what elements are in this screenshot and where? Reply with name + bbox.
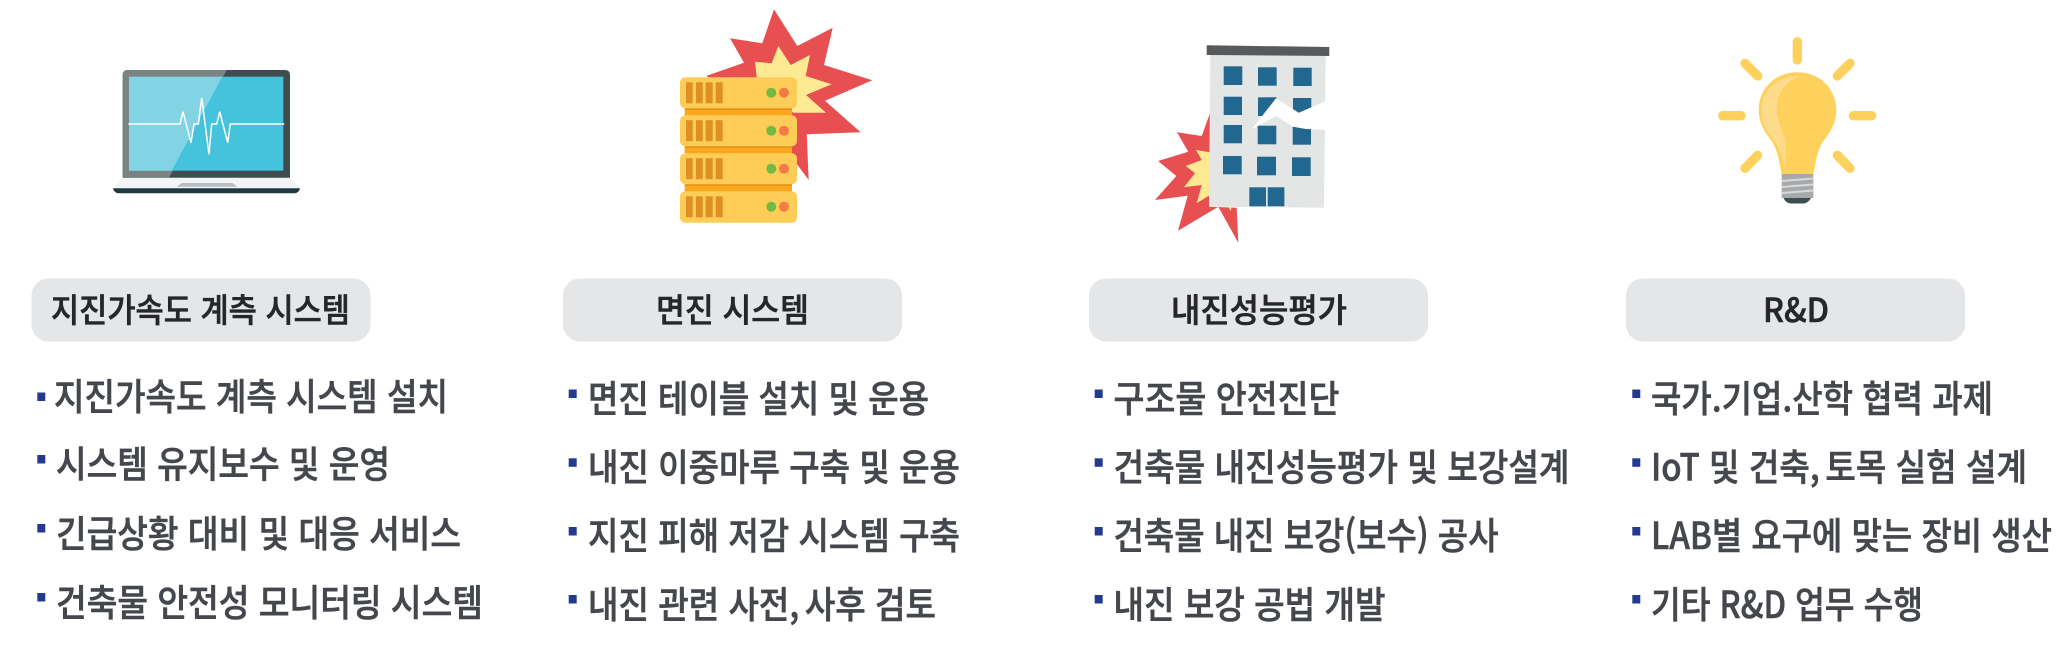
list: R&D 항목: 기타 R&D 업무 수행 bbox=[1651, 575, 1923, 629]
icon: light bulb bbox=[1723, 42, 1872, 204]
list: 면진 시스템 항목: 지진 피해 저감 시스템 구축 bbox=[588, 506, 960, 560]
icon: laptop with seismograph bbox=[113, 70, 300, 193]
list: 내진성능평가 항목 bbox=[1095, 369, 1570, 629]
heading pill bbox=[1626, 278, 1965, 342]
list: 면진 시스템 항목: 면진 테이블 설치 및 운용 bbox=[588, 369, 929, 423]
list: 내진성능평가 항목: 구조물 안전진단 bbox=[1114, 369, 1340, 423]
list: 지진가속도 계측 항목: 지진가속도 계측 시스템 설치 bbox=[54, 367, 448, 421]
list: 내진성능평가 항목: 내진 보강 공법 개발 bbox=[1114, 575, 1386, 629]
heading pill: 지진가속도 계측 시스템 bbox=[51, 284, 350, 332]
list: 지진가속도 계측 항목: 건축물 안전성 모니터링 시스템 bbox=[56, 573, 483, 627]
heading pill bbox=[1089, 278, 1428, 342]
list: 지진가속도 계측 항목: 시스템 유지보수 및 운영 bbox=[56, 434, 390, 488]
icon: damaged building with explosion bbox=[1155, 45, 1329, 243]
heading pill bbox=[563, 278, 902, 342]
list: R&D 항목: 국가.기업.산학 협력 과제 bbox=[1651, 369, 1993, 423]
list: 면진 시스템 항목: 내진 관련 사전, 사후 검토 bbox=[588, 575, 936, 629]
panel: R&D bbox=[1626, 42, 2052, 629]
heading pill: 내진성능평가 bbox=[1171, 284, 1347, 332]
icon: server rack with explosion bbox=[680, 9, 872, 223]
list: 내진성능평가 항목: 건축물 내진 보강(보수) 공사 bbox=[1114, 506, 1498, 560]
list: R&D 항목: IoT 및 건축, 토목 실험 설계 bbox=[1651, 438, 2027, 492]
list: 면진 시스템 항목: 내진 이중마루 구축 및 운용 bbox=[588, 438, 960, 492]
list: 면진 시스템 항목 bbox=[569, 369, 960, 629]
list: R&D 항목 bbox=[1632, 369, 2052, 629]
panel: 면진 시스템 bbox=[563, 9, 960, 629]
heading pill: R&D bbox=[1763, 284, 1829, 332]
panel: 지진가속도 계측 시스템 bbox=[32, 70, 483, 627]
list: 내진성능평가 항목: 건축물 내진성능평가 및 보강설계 bbox=[1114, 438, 1570, 492]
list: 지진가속도 계측 항목: 긴급상황 대비 및 대응 서비스 bbox=[56, 504, 461, 558]
panel: 내진성능평가 bbox=[1089, 45, 1570, 629]
heading pill: 면진 시스템 bbox=[656, 284, 809, 332]
list: 지진가속도 계측 항목 bbox=[37, 367, 483, 627]
